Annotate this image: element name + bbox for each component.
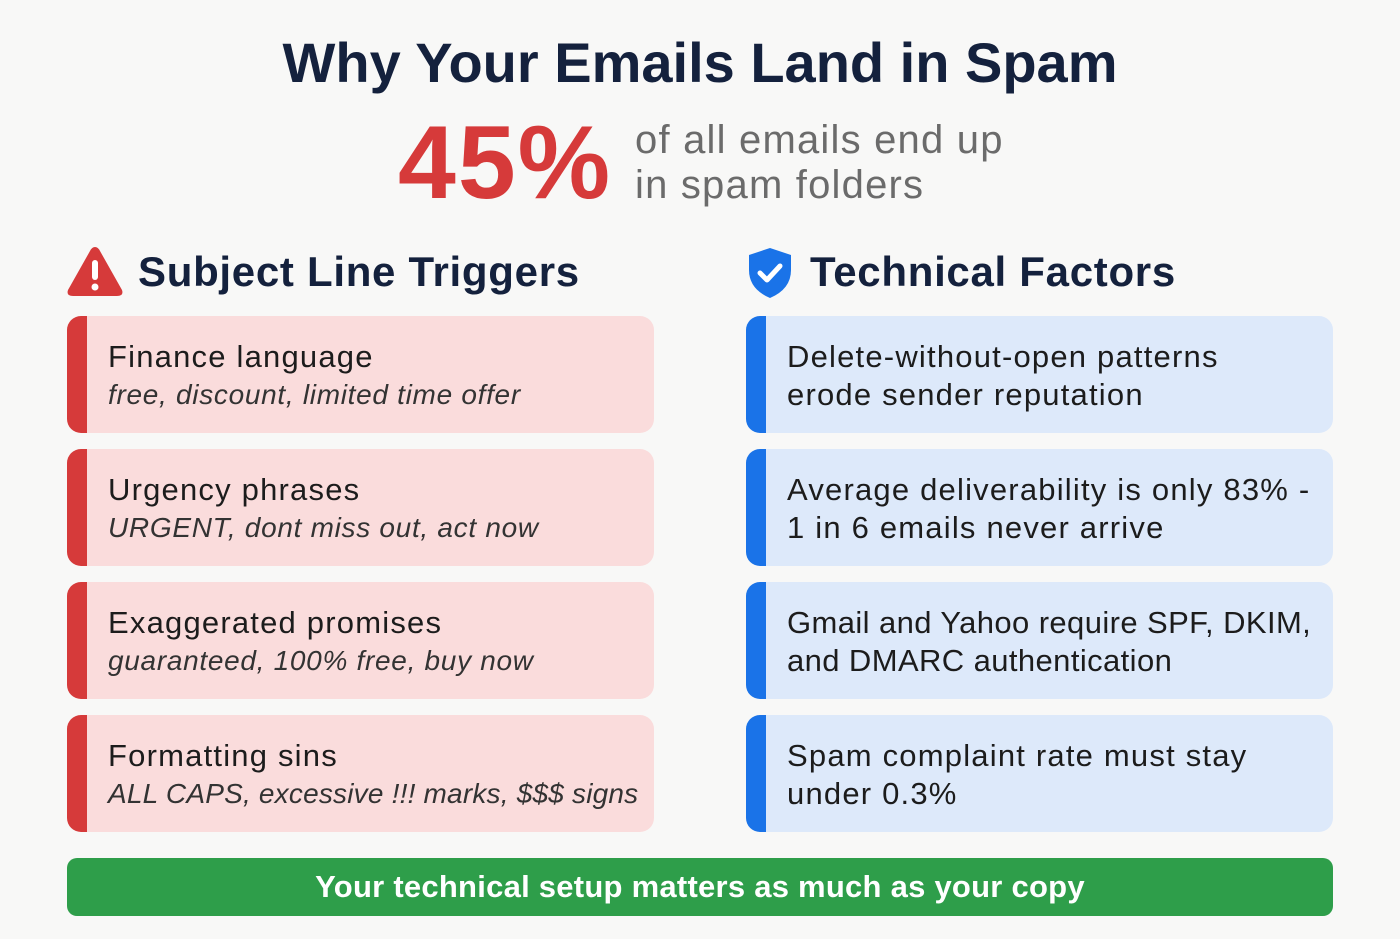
card: exaggerated promises: [67, 582, 654, 699]
card: exaggerated promises: guaranteed, 100% free, buy now: [108, 645, 534, 676]
icon: shield: [749, 248, 791, 298]
card: delete-without-open: Delete-without-open patterns: [787, 339, 1219, 374]
card: delete-without-open: erode sender reputation: [787, 377, 1144, 412]
card: formatting sins: Formatting sins: [108, 738, 338, 773]
card: authentication: and DMARC authentication: [787, 643, 1172, 678]
card: urgency phrases: Urgency phrases: [108, 472, 360, 507]
card: deliverability: 1 in 6 emails never arrive: [787, 510, 1165, 545]
card: authentication: Gmail and Yahoo require SPF, DKIM,: [787, 605, 1311, 640]
card: authentication: [746, 582, 1333, 699]
stat caption: [635, 118, 1004, 207]
card: complaint rate: Spam complaint rate must stay: [787, 738, 1247, 773]
card: complaint rate: under 0.3%: [787, 776, 958, 811]
icon: warning triangle: [68, 247, 122, 296]
card: exaggerated promises: Exaggerated promises: [108, 605, 442, 640]
card: deliverability: Average deliverability is only 83% -: [787, 472, 1310, 507]
title: Why Your Emails Land in Spam: [283, 31, 1117, 94]
card: deliverability: [746, 449, 1333, 566]
card: formatting sins: [67, 715, 654, 832]
heading: Technical Factors: Technical Factors: [810, 248, 1176, 295]
card: finance language: [67, 316, 654, 433]
heading: Subject Line Triggers: Subject Line Triggers: [138, 248, 580, 295]
card: formatting sins: ALL CAPS, excessive !!! marks, $$$ signs: [108, 778, 638, 809]
footer banner: Your technical setup matters as much as your copy: [315, 869, 1085, 904]
card: urgency phrases: [67, 449, 654, 566]
footer banner: [67, 858, 1333, 916]
stat caption: of all emails end up: [635, 118, 1004, 162]
stat: 45%: 45%: [398, 105, 612, 221]
card: delete-without-open: [746, 316, 1333, 433]
stat caption: in spam folders: [635, 163, 924, 207]
card: urgency phrases: URGENT, dont miss out, act now: [108, 512, 539, 543]
card: finance language: Finance language: [108, 339, 374, 374]
card: complaint rate: [746, 715, 1333, 832]
card: finance language: free, discount, limited time offer: [108, 379, 521, 410]
